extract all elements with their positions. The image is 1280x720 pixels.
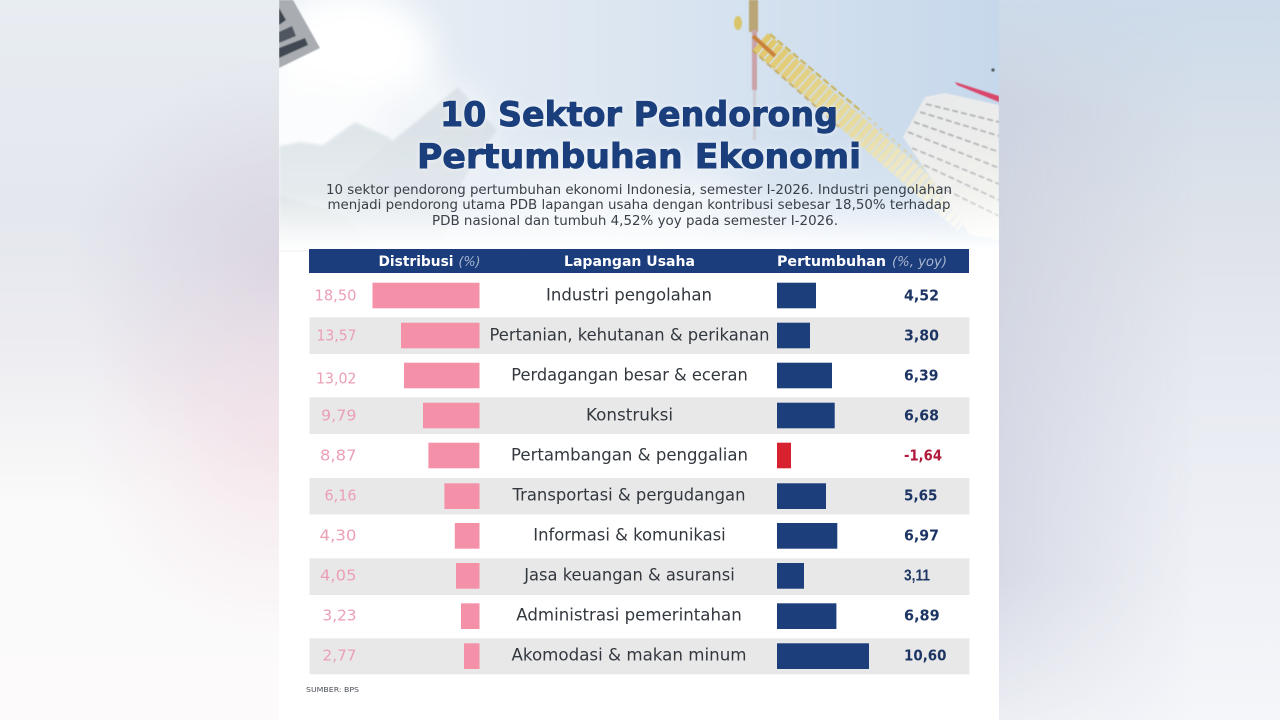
row: Industri pengolahan: Industri pengolahan	[546, 286, 712, 304]
title: 10 Sektor Pendorong	[440, 95, 838, 135]
panel: infographic card	[279, 0, 999, 692]
row: Perdagangan besar & eceran: Perdagangan besar & eceran	[511, 366, 748, 384]
row: Jasa keuangan & asuransi: 4,05	[320, 566, 356, 584]
blurred backdrop: right side	[999, 0, 1280, 720]
row: Administrasi pemerintahan: Administrasi pemerintahan	[516, 606, 742, 624]
row: Jasa keuangan & asuransi	[310, 558, 970, 595]
row: Transportasi & pergudangan	[310, 478, 970, 514]
row: Informasi & komunikasi: 6,97	[904, 526, 939, 544]
row: Konstruksi: 9,79	[321, 406, 356, 424]
title: 10 Sektor Pendorong	[440, 95, 838, 135]
row: Administrasi pemerintahan	[322, 603, 940, 629]
row: Pertanian, kehutanan & perikanan: 13,57	[316, 326, 356, 344]
icon: tower crane	[734, 0, 965, 222]
row: Perdagangan besar & eceran	[316, 363, 938, 388]
table header bar	[309, 249, 969, 273]
title	[419, 98, 861, 170]
row: Administrasi pemerintahan: 3,23	[322, 606, 356, 624]
table header bar: Distribusi	[378, 254, 454, 270]
row: Akomodasi & makan minum: 10,60	[904, 646, 946, 664]
icon: white high-rise with red roof	[903, 68, 999, 240]
table header bar: Lapangan Usaha	[564, 254, 695, 270]
row: Informasi & komunikasi: 4,30	[320, 526, 356, 544]
row: Transportasi & pergudangan: 6,16	[324, 486, 356, 504]
intro paragraph: 10 sektor pendorong pertumbuhan ekonomi Indonesia, semester I-2026. Industri pengolahan	[326, 183, 952, 198]
intro paragraph	[326, 183, 952, 229]
row: Pertambangan & penggalian	[320, 443, 942, 468]
icon: grey skyscrapers	[279, 87, 497, 250]
row: Pertambangan & penggalian: -1,64	[904, 446, 942, 464]
table header bar: Pertumbuhan	[777, 254, 886, 270]
source note: SUMBER: BPS	[306, 686, 360, 694]
row: Pertanian, kehutanan & perikanan	[310, 317, 970, 354]
row: Akomodasi & makan minum: Akomodasi & makan minum	[512, 646, 746, 664]
row: Informasi & komunikasi	[320, 523, 939, 549]
row: Perdagangan besar & eceran: 6,39	[904, 366, 938, 384]
row: Industri pengolahan: 4,52	[904, 286, 939, 304]
intro paragraph: menjadi pendorong utama PDB lapangan usaha dengan kontribusi sebesar 18,50% terhadap	[328, 198, 950, 213]
table header bar: (%, yoy)	[892, 255, 947, 270]
row: Konstruksi: 6,68	[904, 406, 939, 424]
row: Akomodasi & makan minum: 2,77	[322, 646, 356, 664]
title: Pertumbuhan Ekonomi	[417, 137, 861, 177]
row: Pertambangan & penggalian: Pertambangan & penggalian	[511, 446, 748, 464]
row: Konstruksi	[310, 397, 970, 434]
row: Industri pengolahan	[314, 283, 939, 308]
row: Pertambangan & penggalian: 8,87	[320, 446, 356, 464]
row: Jasa keuangan & asuransi: 3,11	[904, 568, 930, 584]
row: Konstruksi: Konstruksi	[586, 406, 673, 424]
intro paragraph: PDB nasional dan tumbuh 4,52% yoy pada semester I-2026.	[432, 214, 838, 229]
row: Perdagangan besar & eceran: 13,02	[316, 370, 356, 388]
row: Transportasi & pergudangan: 5,65	[904, 486, 938, 504]
title: Pertumbuhan Ekonomi	[417, 137, 861, 177]
row: Pertanian, kehutanan & perikanan: 3,80	[904, 326, 939, 344]
icon: corner building	[279, 0, 320, 68]
row: Akomodasi & makan minum	[310, 638, 970, 674]
row: Administrasi pemerintahan: 6,89	[904, 606, 940, 624]
blurred backdrop: left side	[0, 0, 279, 720]
row: Jasa keuangan & asuransi: Jasa keuangan & asuransi	[523, 566, 735, 584]
row: Industri pengolahan: 18,50	[314, 286, 356, 304]
row: Informasi & komunikasi: Informasi & komunikasi	[533, 526, 726, 544]
table header bar: (%)	[458, 255, 480, 270]
row: Pertanian, kehutanan & perikanan: Pertanian, kehutanan & perikanan	[490, 326, 770, 344]
row: Transportasi & pergudangan: Transportasi & pergudangan	[512, 486, 746, 504]
photo header: sky, clouds, crane and buildings	[220, 0, 999, 250]
